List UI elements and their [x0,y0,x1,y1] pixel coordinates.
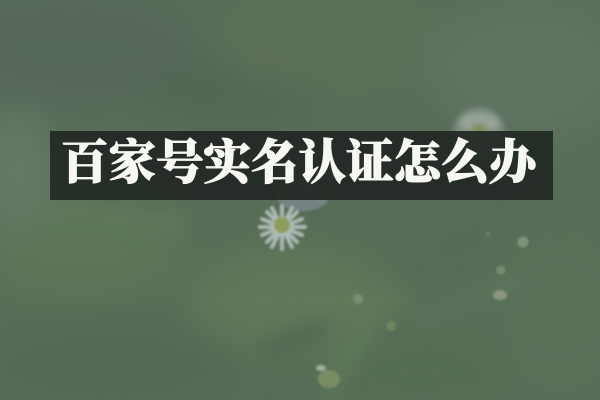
blurred foliage streaks [40,210,560,390]
title band [50,131,553,200]
daisy: center, partly behind band [277,181,329,211]
daisy: upper right, behind band [453,107,505,159]
daisy: center, in focus [260,206,305,249]
title: 百家号实名认证怎么办 [61,138,536,190]
small buds and stems [316,232,528,388]
